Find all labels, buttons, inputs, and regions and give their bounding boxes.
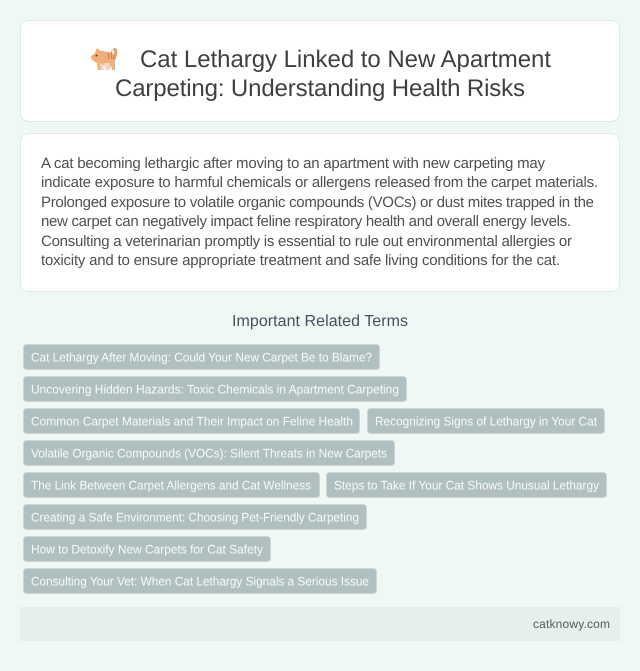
tag: consulting your vet — [24, 568, 376, 594]
tag: safe environment: Creating a Safe Environment: Choosing Pet-Friendly Carpeting — [31, 510, 359, 524]
text block: summary: new carpet can negatively impact feline respiratory health and overall energy levels. — [41, 213, 571, 230]
panel: title card — [20, 20, 620, 122]
tags: related terms — [24, 344, 606, 594]
tag: carpet allergens: The Link Between Carpet Allergens and Cat Wellness — [31, 478, 311, 492]
tag: consulting your vet: Consulting Your Vet: When Cat Lethargy Signals a Serious Issue — [31, 574, 369, 588]
heading: title: Carpeting: Understanding Health Risks — [115, 75, 525, 102]
tag: carpet materials: Common Carpet Materials and Their Impact on Feline Health — [31, 414, 353, 428]
text block: summary: A cat becoming lethargic after moving to an apartment with new carpeting may — [41, 155, 546, 172]
tag: carpet allergens — [24, 472, 320, 498]
icon: cat — [91, 48, 117, 70]
heading: title: Cat Lethargy Linked to New Apartment — [140, 46, 551, 73]
tag: hidden hazards: Uncovering Hidden Hazards: Toxic Chemicals in Apartment Carpeting — [31, 382, 399, 396]
tag: cat lethargy after moving — [24, 344, 380, 370]
tag: safe environment — [24, 504, 366, 530]
tag: detoxify carpets: How to Detoxify New Carpets for Cat Safety — [31, 542, 264, 556]
text block: summary: Consulting a veterinarian promptly is essential to rule out environmental allergies or — [41, 233, 572, 250]
heading: related terms: Important Related Terms — [232, 313, 408, 330]
tag: VOCs — [24, 440, 394, 466]
panel: summary text — [20, 134, 620, 292]
footer — [20, 607, 620, 641]
tag: steps to take — [326, 472, 606, 498]
tag: cat lethargy after moving: Cat Lethargy After Moving: Could Your New Carpet Be to Blame? — [31, 350, 372, 364]
tag: carpet materials — [24, 408, 360, 434]
text block: summary — [41, 155, 598, 269]
tag: signs of lethargy — [368, 408, 604, 434]
tag: steps to take: Steps to Take If Your Cat Shows Unusual Lethargy — [334, 478, 600, 492]
text block: summary: Prolonged exposure to volatile organic compounds (VOCs) or dust mites trapped in the — [41, 194, 594, 211]
text block: summary: indicate exposure to harmful chemicals or allergens released from the carpet materials. — [41, 174, 598, 191]
text block: summary: toxicity and to ensure appropriate treatment and safe living conditions for the cat. — [41, 252, 560, 269]
tag: VOCs: Volatile Organic Compounds (VOCs): Silent Threats in New Carpets — [31, 446, 387, 460]
tag: hidden hazards — [24, 376, 406, 402]
heading: title — [115, 46, 551, 102]
footer: site name: catknowy.com — [533, 617, 610, 631]
tag: signs of lethargy: Recognizing Signs of Lethargy in Your Cat — [375, 414, 597, 428]
tag: detoxify carpets — [24, 536, 270, 562]
